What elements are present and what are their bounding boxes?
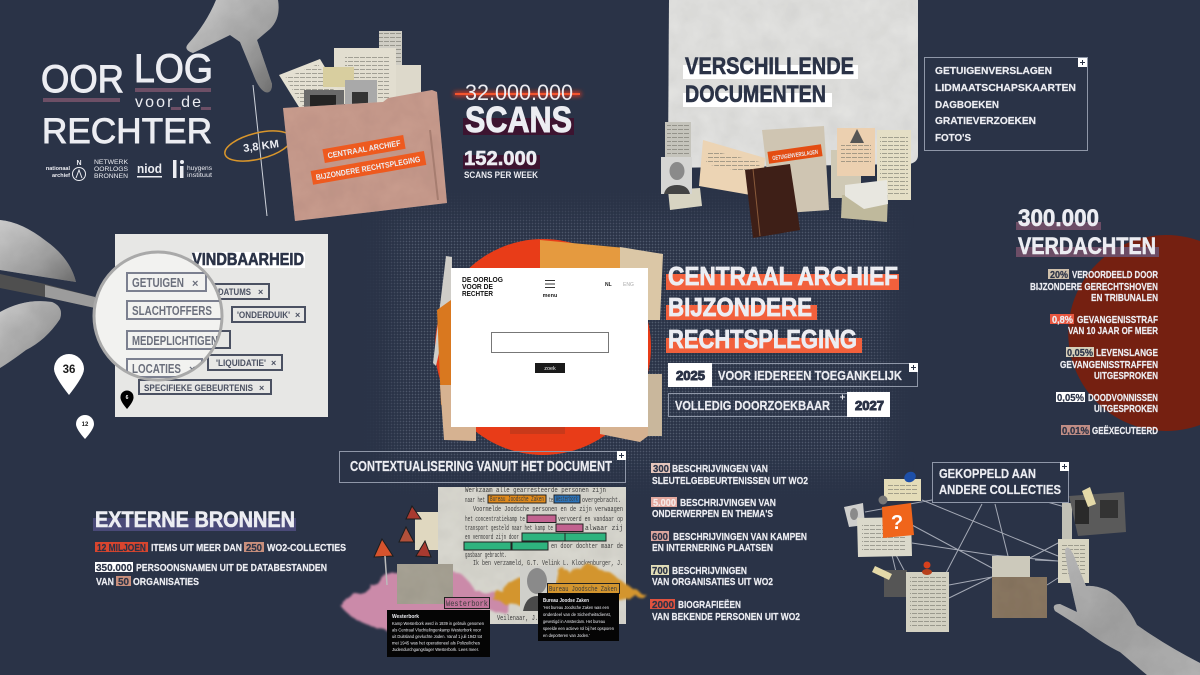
- linked photo: [1069, 492, 1126, 536]
- list box: document types: LIDMAATSCHAPSKAARTEN: [935, 82, 1076, 94]
- callout: 2027: [668, 392, 890, 417]
- popup: bureau joodse zaken: onderdeel van de Sicherheitsdienst,: [543, 612, 611, 617]
- list box: document types: [924, 58, 1088, 150]
- papers in folder: [279, 31, 421, 112]
- magnifier lens: [94, 252, 229, 380]
- envelope: [841, 180, 888, 222]
- heading: externe bronnen: EXTERNE BRONNEN: [95, 507, 295, 532]
- stat: 0,8%: VAN 10 JAAR OF MEER: [1068, 325, 1158, 337]
- partner logos: archief: [52, 173, 70, 179]
- orange question note: ?: [891, 512, 903, 534]
- title: oorlog voor de rechter: LOG: [134, 47, 213, 91]
- stat circle: dark red: [1068, 235, 1200, 431]
- large tag: getuigen: GETUIGEN: [132, 276, 184, 290]
- icon: map pin 36: 36: [63, 364, 75, 376]
- partner logos: N: [76, 160, 82, 167]
- portrait photo: [520, 566, 556, 611]
- text: 300 beschrijvingen: 300: [653, 463, 669, 475]
- text: 5.000 beschrijvingen: BESCHRIJVINGEN VAN: [680, 497, 776, 509]
- tape note: [1082, 487, 1096, 507]
- document text: alwaar zij: [585, 525, 623, 533]
- stat: 32.000.000 scans: SCANS: [465, 99, 572, 140]
- stat: 0,01%: [1061, 424, 1158, 437]
- passport photo: [661, 157, 692, 194]
- small portrait: [844, 503, 865, 527]
- popup: bureau joodse zaken: speelde een actieve rol bij het opsporen: [543, 626, 615, 631]
- text: 2000 biografieen: BIOGRAFIEËEN: [678, 598, 741, 611]
- connecting lines: [865, 500, 1065, 598]
- text: 350.000 persoonsnamen: PERSOONSNAMEN UIT DE DATABESTANDEN: [136, 562, 327, 574]
- stat heading: 300.000 verdachten: VERDACHTEN: [1018, 233, 1156, 260]
- text: 600 beschrijvingen: 600: [652, 531, 668, 543]
- popup: westerbork: Kamp Westerbork werd in 1939 in gebruik genomen: [392, 621, 485, 626]
- search page card: [451, 268, 648, 427]
- icon: black map pin: [120, 391, 134, 409]
- label: bureau joodsche zaken: [548, 584, 620, 594]
- document text: Voormelde Joodsche personen en de zijn verwaagen: [473, 506, 623, 514]
- popup: bureau joodse zaken: en deporteren van Joden.': [543, 633, 590, 638]
- partner logos: OORLOGS: [94, 166, 128, 173]
- folder body: [283, 90, 447, 221]
- text: 600 beschrijvingen: BESCHRIJVINGEN VAN KAMPEN: [673, 531, 807, 543]
- search page card: RECHTER: [462, 291, 493, 298]
- stat: 0,01%: 0,01%: [1062, 425, 1090, 437]
- popup: westerbork: [387, 610, 490, 657]
- stat: 0,01%: GEËXECUTEERD: [1092, 424, 1158, 437]
- large tag: getuigen: SLACHTOFFERS: [132, 304, 212, 318]
- document collage: [661, 122, 911, 238]
- text: 12 miljoen items: 12 MILJOEN: [97, 542, 146, 554]
- callout: 2027: 2027: [855, 398, 884, 413]
- text: 350.000 persoonsnamen: ORGANISATIES: [133, 576, 199, 588]
- partner logos: niod: [137, 161, 162, 176]
- box: gekoppeld aan andere collecties: ANDERE COLLECTIES: [939, 482, 1061, 497]
- popup: bureau joodse zaken: Bureau Joodse Zaken: [543, 598, 590, 604]
- title: oorlog voor de rechter: OOR: [41, 58, 124, 101]
- search page card: menu: [543, 293, 557, 299]
- note on photo: [872, 566, 892, 580]
- tag: datums: [212, 284, 269, 299]
- search page card: VOOR DE: [462, 284, 493, 291]
- document text: Bureau Joodsche Zaken: [490, 496, 544, 504]
- label: 3,8 km: [222, 125, 294, 167]
- title: oorlog voor de rechter: voor de: [135, 94, 201, 111]
- tag: onderduik: 'ONDERDUIK': [237, 310, 290, 321]
- heading: centraal archief bijzondere rechtspleging: BIJZONDERE: [668, 292, 812, 322]
- label: 3,8 km: 3,8 KM: [242, 138, 280, 155]
- stat heading: 300.000 verdachten: 300.000: [1018, 205, 1099, 232]
- stat: 0,05% life sentences: 0,05%: [1067, 347, 1094, 359]
- text: 700 beschrijvingen: [651, 565, 773, 588]
- linked document: [857, 517, 912, 557]
- orange question note: [882, 503, 914, 538]
- engraving: [992, 577, 1047, 618]
- box: gekoppeld aan andere collecties: GEKOPPELD AAN: [939, 466, 1036, 481]
- heading: centraal archief bijzondere rechtspleging: [666, 261, 899, 354]
- large tag: getuigen: LOCATIES: [132, 362, 181, 376]
- heading: centraal archief bijzondere rechtspleging: CENTRAAL ARCHIEF: [668, 261, 898, 291]
- text: 300 beschrijvingen: SLEUTELGEBEURTENISSEN UIT WO2: [652, 475, 808, 487]
- popup: bureau joodse zaken: 'Het bureau Joodsche Zaken was een: [543, 605, 610, 610]
- tag: onderduik: [232, 307, 305, 322]
- stat: 0,05% life sentences: UITGESPROKEN: [1094, 370, 1158, 382]
- tag: liquidatie: 'LIQUIDATIE': [216, 358, 266, 369]
- stat: 0,05% life sentences: GEVANGENISSTRAFFEN: [1060, 359, 1158, 371]
- document text: en door dochter maar de: [551, 543, 623, 551]
- document text: overgebracht.: [582, 497, 621, 505]
- list box: document types: GETUIGENVERSLAGEN: [935, 65, 1052, 77]
- document text: transport gesteld naar het kamp te: [465, 525, 553, 533]
- stat: 32.000.000 scans: [454, 80, 581, 140]
- text: 300 beschrijvingen: BESCHRIJVINGEN VAN: [672, 463, 768, 475]
- stat: 0,05% death sentences: 0,05%: [1057, 392, 1085, 404]
- text: 5.000 beschrijvingen: 5.000: [653, 497, 676, 509]
- heading: verschillende documenten: DOCUMENTEN: [685, 81, 826, 108]
- popup: westerbork: Judendurchgangslager Westerbork. Lees meer.: [392, 647, 479, 652]
- document highlights: [464, 495, 606, 550]
- callout: 2025: [668, 363, 918, 387]
- callout: 2027: VOLLEDIG DOORZOEKBAAR: [675, 398, 831, 413]
- smoke cloud: orange: [493, 566, 644, 606]
- stat: 20%: BIJZONDERE GERECHTSHOVEN: [1030, 281, 1158, 293]
- archive folder with papers: [279, 31, 447, 221]
- document text: Werkzaam alle gearresteerde personen zijn: [465, 487, 606, 495]
- panel: vindbaarheid: [115, 234, 328, 417]
- title: oorlog voor de rechter: RECHTER: [42, 112, 212, 151]
- popup: westerbork: mei 1945 was het operationeel als Polizeiliches: [392, 640, 480, 646]
- text: 700 beschrijvingen: VAN ORGANISATIES UIT WO2: [652, 576, 773, 588]
- warning triangle markers: [374, 506, 438, 585]
- text: 350.000 persoonsnamen: [95, 562, 327, 588]
- heading: verschillende documenten: [683, 53, 858, 108]
- box: contextualisering vanuit het document: CONTEXTUALISERING VANUIT HET DOCUMENT: [350, 459, 612, 475]
- stat: 20%: EN TRIBUNALEN: [1091, 292, 1158, 304]
- document text: en vermoord zijn door: [465, 534, 519, 542]
- text: 600 beschrijvingen: [651, 531, 807, 554]
- icon: hand holding magnifier: [0, 220, 95, 368]
- stat: 0,05% life sentences: [1060, 347, 1158, 382]
- tag: datums: DATUMS: [218, 287, 251, 298]
- orange circle: [435, 239, 651, 455]
- tag: liquidatie: [208, 355, 282, 370]
- callout: 2025: VOOR IEDEREEN TOEGANKELIJK: [718, 368, 903, 383]
- document text: gasbaar gebracht.: [465, 552, 507, 560]
- callout: 2025: 2025: [676, 368, 705, 383]
- archive papers: [433, 240, 663, 442]
- popup: bureau joodse zaken: [538, 593, 619, 641]
- large tag: getuigen: ×: [189, 364, 195, 376]
- document text: te: [549, 497, 553, 505]
- icon: red pin: [922, 562, 932, 575]
- text: 600 beschrijvingen: EN INTERNERING PLAATSEN: [652, 542, 773, 554]
- partner logos: NETWERK: [94, 159, 129, 166]
- popup: westerbork: Westerbork: [392, 614, 420, 620]
- icon: pointing hand right: [1054, 548, 1200, 675]
- list box: document types: FOTO'S: [935, 132, 971, 144]
- text: 12 miljoen items: WO2-COLLECTIES: [267, 542, 346, 554]
- label: getuigenverslagen: [767, 144, 823, 164]
- search page card: ENG: [623, 282, 634, 288]
- list box: document types: GRATIEVERZOEKEN: [935, 115, 1036, 127]
- label: bureau joodsche zaken: Bureau Joodsche Zaken: [549, 586, 617, 594]
- heading: verschillende documenten: VERSCHILLENDE: [685, 53, 854, 80]
- stat: 0,8%: GEVANGENISSTRAF: [1077, 314, 1158, 326]
- stat: 152.000 scans per week: [463, 148, 540, 181]
- text: 2000 biografieen: VAN BEKENDE PERSONEN UIT WO2: [652, 611, 800, 623]
- partner logos: nationaal: [46, 166, 70, 172]
- partner logos: huygens: [187, 165, 213, 172]
- text: 700 beschrijvingen: BESCHRIJVINGEN: [672, 565, 747, 577]
- network of linked collections: [844, 470, 1126, 632]
- stat: 0,8%: 0,8%: [1052, 314, 1074, 326]
- stat: 0,05% death sentences: UITGESPROKEN: [1094, 403, 1158, 415]
- icon: pointing hand top: [186, 0, 279, 92]
- stat: 20%: 20%: [1050, 269, 1069, 281]
- box: gekoppeld aan andere collecties: [932, 462, 1069, 502]
- tag: liquidatie: ×: [271, 358, 276, 368]
- heading: centraal archief bijzondere rechtspleging: RECHTSPLEGING: [668, 324, 857, 354]
- stat heading: 300.000 verdachten: [1016, 205, 1159, 260]
- smoke cloud: pink: [340, 572, 508, 630]
- heading: vindbaarheid: VINDBAARHEID: [192, 249, 304, 269]
- search page card: DE OORLOG: [462, 277, 504, 284]
- icon: black map pin: 6: [126, 395, 129, 401]
- map fragment: [992, 556, 1030, 578]
- large tag: getuigen: ×: [192, 278, 198, 290]
- text: 350.000 persoonsnamen: 50: [118, 576, 129, 588]
- text: 350.000 persoonsnamen: 350.000: [96, 562, 132, 574]
- handwritten letter: [906, 572, 949, 632]
- document text: vervoerd en vandaar op: [558, 516, 623, 524]
- popup: westerbork: uit Duitsland gevluchte Joden. Vanaf 1 juli 1942 tot: [392, 634, 483, 639]
- diary book: [745, 164, 800, 238]
- popup: bureau joodse zaken: gevestigd in Amsterdam. Het bureau: [543, 619, 606, 624]
- stat: 152.000 scans per week: SCANS PER WEEK: [464, 170, 538, 181]
- document text: het concentratiekamp te: [465, 516, 525, 524]
- text: 12 miljoen items: [95, 542, 346, 554]
- tag: onderduik: ×: [295, 310, 300, 320]
- icon: grey pin: [878, 496, 888, 504]
- tag: datums: ×: [258, 287, 263, 297]
- panel: verschillende documenten paper: [668, 0, 918, 168]
- linked note: [884, 479, 921, 501]
- engraving photo: westerbork: [397, 564, 453, 604]
- tag: medeplichtigen remainder: [215, 331, 230, 348]
- folder label: centraal archief: CENTRAAL ARCHIEF: [327, 139, 401, 160]
- document text: Veilenaar, J.Jansen: [497, 615, 557, 623]
- popup: westerbork: als Centraal Vluchtelingenkamp Westerbork voor: [392, 628, 482, 632]
- search page card: zoek: [544, 366, 556, 372]
- measuring line: [253, 85, 267, 216]
- stat: 32.000.000 scans: 32.000.000: [465, 80, 573, 105]
- text: 2000 biografieen: [650, 598, 800, 623]
- tag: specifieke gebeurtenis: ×: [259, 383, 264, 393]
- document text: Westerbork: [556, 496, 578, 504]
- text: 350.000 persoonsnamen: VAN: [96, 576, 114, 588]
- icon: map pin 36: [54, 354, 84, 395]
- text: 12 miljoen items: 250: [246, 542, 262, 554]
- label: getuigenverslagen: GETUIGENVERSLAGEN: [772, 150, 818, 162]
- icon: map pin 12: 12: [82, 422, 89, 428]
- tag: specifieke gebeurtenis: SPECIFIEKE GEBEURTENIS: [144, 383, 253, 394]
- document text: Ik ben verzameld, G.T. Velink L. Klockenburger, J.: [473, 560, 623, 568]
- search page card: NL: [605, 282, 612, 288]
- partner logos: BRONNEN: [94, 173, 128, 180]
- text: 300 beschrijvingen: [651, 463, 808, 487]
- document text: naar het: [465, 497, 485, 505]
- text: 2000 biografieen: 2000: [652, 599, 674, 611]
- text: 5.000 beschrijvingen: ONDERWERPEN EN THEMA'S: [652, 508, 773, 520]
- stat: 0,8%: [1050, 314, 1158, 337]
- stat: 0,05% death sentences: DOODVONNISSEN: [1088, 392, 1158, 404]
- partner logos: instituut: [187, 172, 212, 179]
- title: oorlog voor de rechter: [41, 47, 213, 151]
- tall paper: [1062, 503, 1072, 539]
- icon: blue pin: [902, 470, 918, 484]
- folder label: bijzondere rechtspleging: BIJZONDERE RECHTSPLEGING: [315, 155, 421, 182]
- stat: 152.000 scans per week: 152.000: [464, 148, 537, 170]
- box: contextualisering vanuit het document: [340, 451, 626, 482]
- linked paper: [1058, 539, 1089, 583]
- stat: 0,05% death sentences: [1056, 392, 1158, 415]
- text: 5.000 beschrijvingen: [651, 497, 776, 520]
- panel: typed document: [438, 487, 626, 624]
- text: 12 miljoen items: ITEMS UIT MEER DAN: [151, 542, 242, 554]
- stat: 0,05% life sentences: LEVENSLANGE: [1096, 347, 1158, 359]
- list box: document types: DAGBOEKEN: [935, 99, 999, 111]
- stat: 20%: [1030, 269, 1158, 304]
- icon: map pin 12: [76, 415, 94, 439]
- large tag: getuigen: MEDEPLICHTIGEN: [132, 334, 218, 348]
- small photo: [884, 570, 907, 597]
- label: westerbork: Westerbork: [446, 599, 488, 609]
- document text: [465, 487, 623, 623]
- partner logos: [46, 159, 213, 180]
- text: 700 beschrijvingen: 700: [652, 565, 668, 577]
- search illustration: [433, 239, 663, 455]
- large tag: getuigen: [127, 273, 229, 377]
- stat: 20%: VEROORDEELD DOOR: [1072, 269, 1158, 281]
